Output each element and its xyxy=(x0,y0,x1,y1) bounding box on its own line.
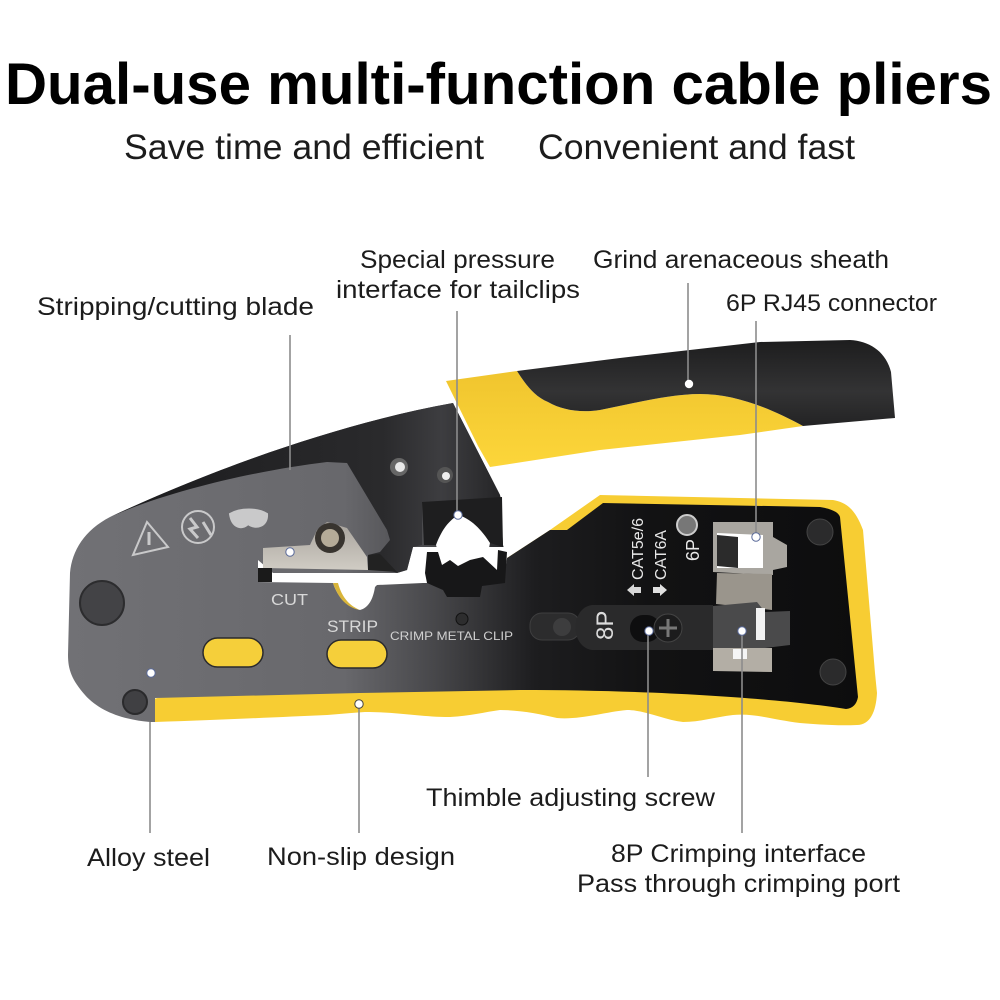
callout: non-slip design xyxy=(267,700,455,871)
die mouth xyxy=(436,515,490,565)
cable pliers illustration xyxy=(68,340,895,725)
plate markings: STRIP xyxy=(327,617,378,636)
yellow slots xyxy=(203,638,387,668)
cutting blade and screw xyxy=(258,522,397,582)
callout: alloy steel xyxy=(87,669,210,872)
lower yellow housing xyxy=(150,495,877,725)
upper crimp die xyxy=(422,497,503,547)
upper dark plate xyxy=(110,403,502,573)
callout: 8P crimping interface xyxy=(577,627,900,898)
callout: 6P RJ45 connector: 6P RJ45 connector xyxy=(726,290,937,317)
callout: 6P RJ45 connector xyxy=(726,290,937,541)
callout: non-slip design: Non-slip design xyxy=(267,843,455,871)
callout: thimble adjusting screw xyxy=(426,627,716,812)
safety icons xyxy=(133,510,267,555)
callout: stripping/cutting blade: Stripping/cutting blade xyxy=(37,293,314,321)
small clip rivet xyxy=(456,613,468,625)
vertical markings: CAT6A xyxy=(653,529,670,580)
vertical markings: CAT5e/6 xyxy=(630,518,647,580)
metal plate body xyxy=(68,403,858,722)
title: Dual-use multi-function cable pliers xyxy=(5,52,992,117)
lower crimp die xyxy=(425,550,507,597)
upper handle xyxy=(446,340,895,467)
upper plate holes xyxy=(390,458,453,483)
callout: stripping/cutting blade xyxy=(37,293,314,556)
crimp die metal block xyxy=(713,522,790,672)
callout: thimble adjusting screw: Thimble adjusting screw xyxy=(426,784,716,812)
subtitle: Save time and efficient xyxy=(124,128,484,167)
subtitle xyxy=(124,128,855,167)
top screw xyxy=(677,515,697,535)
plate markings: CUT xyxy=(271,592,308,609)
callout: special pressure interface xyxy=(336,246,580,519)
subtitle: Convenient and fast xyxy=(538,128,855,167)
callout: special pressure interface: interface for tailclips xyxy=(336,276,580,304)
plate markings xyxy=(271,592,513,643)
slider xyxy=(530,605,713,650)
callout: 8P crimping interface: 8P Crimping interface xyxy=(611,840,866,868)
lower rivet xyxy=(123,690,147,714)
slider: 8P xyxy=(592,611,619,640)
strip notch edge xyxy=(333,583,360,610)
plate markings: CRIMP METAL CLIP xyxy=(390,629,513,643)
vertical markings: 6P xyxy=(683,539,703,561)
callout: alloy steel: Alloy steel xyxy=(87,844,210,872)
jaw opening xyxy=(258,547,507,610)
callout: grind arenaceous sheath: Grind arenaceous sheath xyxy=(593,246,889,274)
pivot rivet xyxy=(80,581,124,625)
callout: 8P crimping interface: Pass through crimping port xyxy=(577,870,900,898)
callout: special pressure interface: Special pressure xyxy=(360,246,555,274)
callout: grind arenaceous sheath xyxy=(593,246,889,388)
vertical markings xyxy=(627,518,703,596)
corner rivets xyxy=(807,519,846,685)
